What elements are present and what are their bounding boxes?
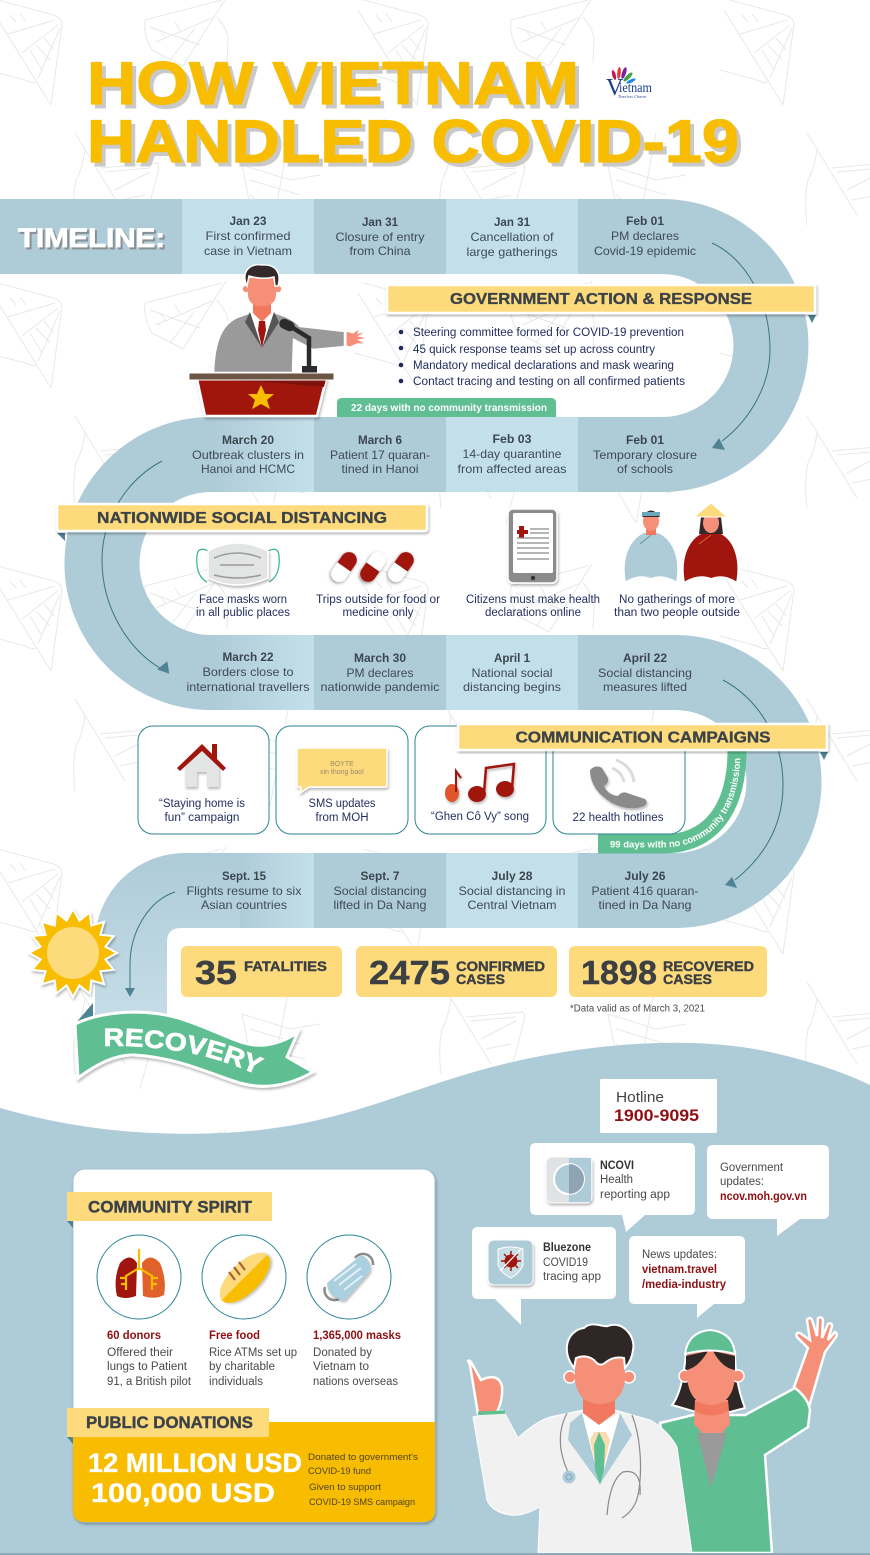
event: Feb 01 schools [593, 433, 697, 476]
bubble: news updates [629, 1236, 745, 1318]
event: Feb 03: from affected areas [458, 462, 566, 476]
list: government actions [399, 327, 685, 388]
stat: fatalities: FATALITIES [244, 958, 327, 974]
text: free food: Rice ATMs set up [209, 1347, 297, 1359]
card: SMS updates [276, 726, 408, 834]
event: Sept. 15: Flights resume to six [186, 884, 302, 898]
donation notes [308, 1452, 418, 1508]
event: March 20: Hanoi and HCMC [201, 462, 295, 476]
event: Jan 31 gatherings: large gatherings [466, 245, 558, 259]
donation amounts [88, 1448, 302, 1508]
icon: bread [202, 1235, 286, 1319]
card: staying home: fun” campaign [164, 812, 240, 824]
timeline row 2 [192, 432, 697, 476]
captions: social distancing: Trips outside for food or [316, 594, 440, 606]
text: free food [209, 1330, 297, 1388]
text: masks: nations overseas [313, 1376, 398, 1388]
logo: Vietnam tourism: Timeless Charm [618, 94, 646, 99]
bubble: news updates: vietnam.travel [642, 1264, 717, 1276]
card: SMS updates: SMS updates [308, 798, 376, 810]
list: government actions: Mandatory medical declarations and mask wearing [413, 360, 674, 372]
card: staying home: “Staying home is [159, 798, 245, 810]
heading: public donations [67, 1408, 269, 1444]
list: government actions: Steering committee formed for COVID-19 prevention [413, 327, 684, 339]
event: July 26: tined in Da Nang [598, 898, 692, 912]
event: Feb 01 schools: Feb 01 [626, 433, 664, 447]
text: masks: Vietnam to [313, 1361, 369, 1373]
event: Feb 01 epidemic: Feb 01 [626, 214, 664, 228]
event: Jan 31 closure: Jan 31 [362, 215, 398, 229]
bubble: NCOVI: NCOVI [600, 1160, 634, 1172]
event: July 26: July 26 [624, 869, 666, 883]
list: government actions: 45 quick response teams set up across country [413, 344, 655, 356]
text: 60 donors: 60 donors [107, 1330, 161, 1342]
event: April 1: National social [472, 666, 552, 680]
card: Ghen Co Vy song: “Ghen Cô Vy” song [431, 811, 529, 823]
event: March 22: Borders close to [202, 665, 294, 679]
event: April 22: measures lifted [603, 680, 687, 694]
event: Jan 31 gatherings: Cancellation of [470, 230, 554, 244]
icon: music notes [445, 764, 514, 802]
donation notes: COVID-19 fund [308, 1466, 371, 1477]
text: masks: Donated by [313, 1347, 372, 1359]
bubble: Bluezone: tracing app [543, 1271, 601, 1283]
icon: two people [624, 503, 738, 583]
heading: timeline: TIMELINE: [18, 223, 165, 253]
event: Feb 03 [458, 432, 566, 476]
event: April 22 [598, 651, 692, 694]
event: March 6 [330, 433, 430, 476]
card: Ghen Co Vy song [415, 726, 546, 834]
banner: nationwide social distancing [57, 504, 427, 541]
banner: recovery: RECOVERY [105, 1028, 265, 1072]
event: July 26: Patient 416 quaran- [592, 884, 698, 898]
illustration: speaker at podium [189, 265, 368, 416]
icon: house [177, 744, 226, 787]
banner: nationwide social distancing: NATIONWIDE SOCIAL DISTANCING [97, 510, 387, 527]
icon: SMS bubble: BOYTE [330, 761, 354, 768]
callout: 22 days [337, 398, 556, 417]
icon: sun [29, 909, 117, 997]
timeline arrow lines [102, 243, 783, 997]
captions: social distancing: No gatherings of more [619, 594, 735, 606]
banner: recovery [73, 1003, 318, 1091]
icon: medical mask [307, 1235, 391, 1319]
event: Feb 03: 14-day quarantine [462, 447, 562, 461]
stat: fatalities: 35 [195, 954, 237, 991]
text: free food: individuals [209, 1376, 263, 1388]
event: March 30: March 30 [354, 651, 406, 665]
event: Feb 01 epidemic [594, 214, 696, 258]
timeline road [0, 199, 784, 1022]
icon: tablet health form [508, 509, 557, 583]
card: staying home [138, 726, 269, 834]
event: Jan 31 closure: from China [350, 244, 411, 258]
text: masks: 1,365,000 masks [313, 1330, 401, 1342]
timeline row 3 [186, 650, 692, 694]
captions: social distancing: than two people outside [614, 607, 740, 619]
data note: *Data valid as of March 3, 2021 [570, 1004, 705, 1014]
stat: recovered cases: 1898 [581, 954, 657, 991]
event: March 22 [186, 650, 310, 694]
event: Sept. 7: Sept. 7 [360, 869, 400, 883]
event: Jan 23 [204, 214, 292, 258]
banner: government action and response: GOVERNMENT ACTION & RESPONSE [450, 291, 752, 308]
event: Jan 23: First confirmed [206, 229, 290, 243]
title: HANDLED COVID-19 [91, 112, 743, 179]
event: March 30: PM declares [346, 666, 414, 680]
timeline row 4 [186, 869, 698, 912]
event: Sept. 15: Sept. 15 [222, 869, 266, 883]
banner: government action and response [387, 285, 816, 323]
event: Jan 31 gatherings [466, 215, 558, 259]
event: Sept. 15 [186, 869, 302, 912]
captions: social distancing: medicine only [342, 607, 414, 619]
stat: recovered cases: RECOVERED [663, 958, 754, 974]
title: HOW VIETNAM [87, 50, 579, 117]
stat: fatalities [181, 946, 342, 997]
title: HOW VIETNAM [91, 54, 583, 121]
hotline box [600, 1079, 717, 1133]
callout: 22 days: 22 days with no community transmission [351, 402, 547, 414]
title [87, 50, 743, 179]
bubble: Bluezone: Bluezone [543, 1242, 591, 1254]
event: July 26 [592, 869, 698, 912]
bubble: government updates: ncov.moh.gov.vn [720, 1191, 807, 1203]
event: July 28: Social distancing in [458, 884, 566, 898]
donation amounts: 100,000 USD [91, 1478, 275, 1508]
bubble: Bluezone [472, 1227, 616, 1325]
hotline box: Hotline [616, 1090, 664, 1106]
event: March 22: international travellers [186, 680, 310, 694]
card: health hotlines: 22 health hotlines [572, 812, 664, 824]
event: Jan 23: Jan 23 [230, 214, 267, 228]
text: free food: by charitable [209, 1361, 275, 1373]
card: SMS updates: from MOH [316, 812, 368, 824]
panel: community spirit and public donations [67, 1169, 435, 1522]
event: July 28: July 28 [492, 869, 533, 883]
event: March 30: nationwide pandemic [320, 680, 440, 694]
captions: social distancing: declarations online [485, 607, 581, 619]
donation notes: Given to support [309, 1482, 381, 1493]
bubble: news updates: News updates: [642, 1249, 717, 1261]
stat: confirmed cases: CASES [456, 971, 505, 987]
bubble: government updates: updates: [720, 1176, 764, 1188]
bubble: NCOVI: reporting app [600, 1189, 670, 1201]
captions: social distancing: in all public places [196, 607, 290, 619]
icon: face mask [197, 543, 279, 585]
event: Jan 31 gatherings: Jan 31 [494, 215, 530, 229]
illustration: doctor [468, 1324, 692, 1553]
event: Jan 31 closure: Closure of entry [336, 230, 424, 244]
event: Jan 23: case in Vietnam [204, 244, 292, 258]
icon: lungs [97, 1235, 181, 1319]
title: HANDLED COVID-19 [87, 108, 739, 175]
captions: social distancing [196, 594, 740, 619]
event: April 1: April 1 [494, 651, 530, 665]
event: Sept. 7: Social distancing [334, 884, 426, 898]
icon: NCOVI app [546, 1157, 592, 1203]
footer edge [0, 1553, 870, 1555]
text: 60 donors: 91, a British pilot [107, 1376, 192, 1388]
heading: public donations: PUBLIC DONATIONS [86, 1414, 253, 1432]
event: Feb 03: Feb 03 [492, 432, 532, 446]
bubble: government updates [707, 1145, 829, 1236]
event: March 20 [192, 433, 304, 476]
heading: timeline: TIMELINE: [20, 225, 167, 255]
event: March 6: March 6 [358, 433, 402, 447]
bubble: NCOVI: Health [600, 1174, 633, 1186]
illustration: nurse [660, 1317, 837, 1553]
bubble: news updates: /media-industry [642, 1279, 727, 1291]
donation amounts: 12 MILLION USD [88, 1448, 302, 1478]
event: Feb 01 schools: Temporary closure [593, 448, 697, 462]
stat: confirmed cases: 2475 [369, 954, 450, 991]
heading: community spirit: COMMUNITY SPIRIT [88, 1198, 252, 1216]
event: Sept. 7: lifted in Da Nang [334, 898, 426, 912]
logo: Vietnam tourism: ietnam [619, 80, 652, 95]
icon: Bluezone app [488, 1240, 533, 1285]
event: Sept. 7 [334, 869, 426, 912]
icon: SMS bubble: xin thong bao! [320, 769, 364, 776]
hotline box: 1900-9095 [614, 1106, 699, 1125]
icon: phone [590, 760, 647, 808]
card: health hotlines [553, 726, 685, 834]
bubble: NCOVI [530, 1143, 695, 1232]
stat: confirmed cases: CONFIRMED [456, 958, 545, 974]
event: Jan 31 closure [336, 215, 424, 258]
event: July 28 [458, 869, 566, 912]
event: March 6: Patient 17 quaran- [330, 448, 430, 462]
icon: pills [328, 549, 417, 585]
event: April 22: April 22 [623, 651, 667, 665]
bottom panel background [0, 1043, 870, 1555]
callout: 99 days curved band: 99 days with no community transmission [610, 758, 740, 850]
text: free food: Free food [209, 1330, 260, 1342]
text: 60 donors [107, 1330, 192, 1388]
bubble: Bluezone: COVID19 [543, 1257, 588, 1269]
heading: community spirit [67, 1192, 272, 1228]
text: 60 donors: lungs to Patient [107, 1361, 188, 1373]
logo: Vietnam tourism: V [606, 75, 624, 101]
event: March 6: tined in Hanoi [342, 462, 418, 476]
stat: confirmed cases [356, 946, 557, 997]
event: April 22: Social distancing [598, 666, 692, 680]
banner: communication campaigns: COMMUNICATION CAMPAIGNS [516, 730, 771, 746]
event: April 1: distancing begins [463, 680, 561, 694]
bubble: government updates: Government [720, 1162, 784, 1174]
event: Sept. 15: Asian countries [201, 898, 287, 912]
list: government actions: Contact tracing and testing on all confirmed patients [413, 376, 685, 388]
donation notes: Donated to government's [308, 1452, 418, 1463]
stat: recovered cases [569, 946, 767, 997]
text: 60 donors: Offered their [107, 1347, 173, 1359]
banner: communication campaigns [458, 724, 828, 760]
logo: Vietnam tourism [606, 67, 652, 101]
event: April 1 [463, 651, 561, 694]
event: March 22: March 22 [222, 650, 274, 664]
event: Feb 01 epidemic: PM declares [611, 229, 679, 243]
timeline row 1 [204, 214, 696, 259]
event: Feb 01 schools: of schools [617, 462, 673, 476]
captions: social distancing: Citizens must make health [466, 594, 600, 606]
stat: recovered cases: CASES [663, 971, 712, 987]
donation notes: COVID-19 SMS campaign [309, 1497, 415, 1508]
event: March 20: March 20 [222, 433, 274, 447]
event: March 30 [320, 651, 440, 694]
icon: SMS bubble [297, 748, 387, 793]
captions: social distancing: Face masks worn [199, 594, 287, 606]
event: Feb 01 epidemic: Covid-19 epidemic [594, 244, 696, 258]
text: masks [313, 1330, 401, 1388]
event: March 20: Outbreak clusters in [192, 448, 304, 462]
event: July 28: Central Vietnam [468, 898, 556, 912]
